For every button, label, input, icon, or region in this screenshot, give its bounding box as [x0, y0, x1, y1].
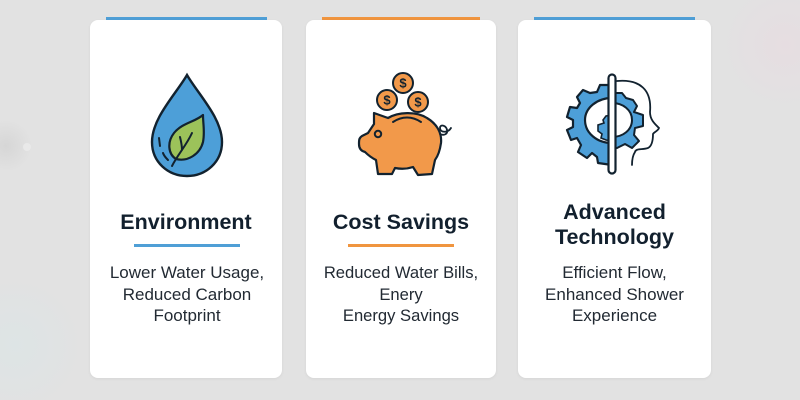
- text: environment benefits: Reduced Carbon: [123, 285, 251, 304]
- text: technology benefits: Efficient Flow,: [562, 263, 667, 282]
- panel: environment: [90, 20, 282, 378]
- icon: piggy bank with coins: $: [399, 76, 407, 90]
- top accent: advanced technology: [534, 17, 695, 20]
- text: environment benefits: [110, 263, 264, 325]
- heading: advanced technology: Advanced: [563, 200, 666, 224]
- text: cost savings benefits: Energy Savings: [343, 306, 459, 325]
- top accent: environment: [106, 17, 267, 20]
- text: environment benefits: Footprint: [153, 306, 221, 325]
- text: environment benefits: Lower Water Usage,: [110, 263, 264, 282]
- heading: cost savings: Cost Savings: [333, 210, 469, 234]
- icon: piggy bank with coins: [358, 72, 452, 176]
- text: technology benefits: Enhanced Shower: [545, 285, 684, 304]
- top accent: cost savings: [322, 17, 480, 20]
- icon: piggy bank with coins: $: [383, 92, 391, 108]
- divider: cost savings: [348, 244, 454, 247]
- text: technology benefits: [545, 263, 684, 325]
- heading: advanced technology: [555, 200, 674, 249]
- text: cost savings benefits: [324, 263, 478, 325]
- panel: cost savings: [306, 20, 496, 378]
- icon: water drop with leaf: [150, 72, 224, 178]
- panel: advanced technology: [518, 20, 711, 378]
- text: cost savings benefits: Enery: [379, 285, 423, 304]
- text: cost savings benefits: Reduced Water Bills,: [324, 263, 478, 282]
- icon: gear and head: [566, 73, 660, 175]
- divider: environment: [134, 244, 240, 247]
- heading: environment: Environment: [120, 210, 252, 234]
- heading: advanced technology: Technology: [555, 225, 674, 249]
- text: technology benefits: Experience: [572, 306, 657, 325]
- icon: piggy bank with coins: $: [414, 94, 422, 110]
